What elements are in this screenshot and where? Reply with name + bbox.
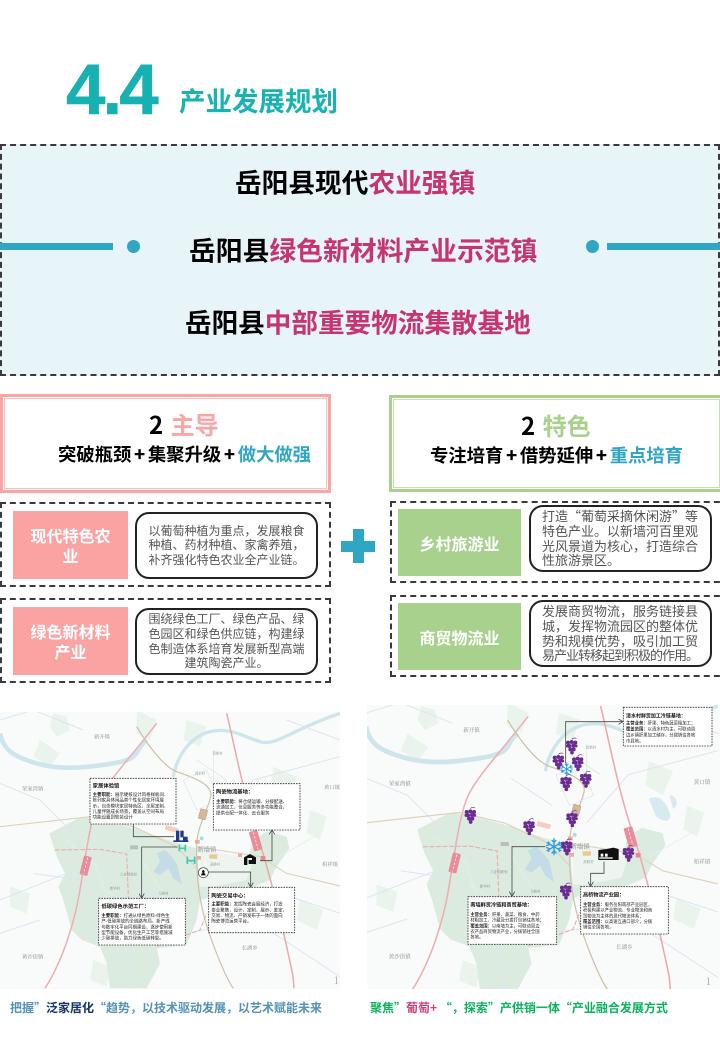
map place names: 高桥村 (210, 862, 221, 867)
description: rural tourism (529, 505, 712, 572)
right map place names: 工业园规划 (490, 869, 508, 874)
callout: Xinqiang cold chain and trade base: 覆盖范围：以南墙为主，可联动周边 (470, 922, 540, 929)
goal line 3: 岳阳县中部重要物流集散基地 (185, 302, 531, 341)
map place names: 新开镇 (94, 733, 111, 741)
callout: logistics base: 流通加工、信息服务等多功能整合， (216, 804, 287, 811)
map place names: 新华村 (110, 885, 121, 890)
callout: experience hall: 儿童伴随成长场景，覆盖从空间布局 (93, 808, 164, 815)
icon: logistics park building (598, 848, 619, 860)
section number: 4.4 (66, 51, 156, 130)
map place names: 1 (334, 973, 339, 987)
description: green materials: 建筑陶瓷产业。 (184, 654, 268, 671)
connector lines (133, 824, 272, 898)
callout: Qingshui cold chain base: 覆盖范围：以清水村为主，可联动周 (626, 726, 695, 733)
callout: Xinqiang cold chain and trade base: 南墙鲜货冷链和商贸基地： (470, 901, 532, 909)
map place names: 清水村 (195, 770, 206, 775)
callout: Gaoqiao logistics park: 主营业务：服务岳阳南部产业园区， (583, 901, 652, 908)
description: modern agriculture (135, 512, 318, 579)
icon: trade center (198, 868, 208, 878)
icon: logistics base (244, 854, 256, 865)
tag: rural tourism: 乡村旅游业 (419, 530, 500, 554)
map place names: 工业园规划 (120, 871, 137, 876)
description: trade logistics: 发展商贸物流，服务链接县 (542, 601, 698, 620)
map place names: 荣家湾镇 (22, 785, 44, 793)
map: grape industry layout (366, 692, 720, 994)
caption: left map: 把握”泛家居化“趋势，以技术驱动发展，以艺术赋能未来 (10, 999, 322, 1016)
panel: trade logistics (390, 595, 720, 677)
right map place names: 新开镇 (463, 726, 480, 734)
left accent dot (127, 240, 140, 253)
callout: logistics base: 提供仓配一体化、云仓服务 (216, 809, 270, 816)
right map place names: 柏祥镇 (694, 857, 711, 865)
callout: Qingshui cold chain base: 边乡镇肝果加工储存，分拨销往各地 (626, 732, 696, 739)
right map place names: 新华村 (480, 883, 491, 888)
description: trade logistics: 势和规模优势，吸引加工贸 (542, 630, 698, 650)
leading heading: 2 主导 (149, 406, 219, 441)
description: green materials: 围绕绿色工厂、绿色产品、绿 (148, 610, 304, 627)
callout: Qingshui cold chain base: 市县地。 (626, 738, 643, 745)
icon: small cold storage flake (561, 763, 572, 775)
callout: Gaoqiao logistics park: 积极构建以产业物流、专业物流和商 (583, 907, 653, 914)
panel: leading industries header (0, 394, 331, 493)
description: green materials: 色园区和绿色供应链，构建绿 (148, 625, 304, 642)
right map place names: 黄沙街镇 (389, 953, 411, 961)
map place names: 马鞍村 (159, 890, 169, 895)
right map place names: 荣家湾镇 (389, 780, 411, 788)
callout: logistics base (213, 784, 300, 830)
callout: green factory: 产-低碳排放的全链路布局，新产线 (101, 918, 170, 925)
right map place names: 筠新村 (586, 744, 597, 749)
callout: trade center (209, 887, 295, 933)
map place names: 筠新村 (213, 750, 223, 755)
right map place names: 新墙镇 (570, 841, 590, 851)
tag: trade logistics: 商贸物流业 (419, 624, 500, 648)
callout: green factory: 型节能设备，优化生产工艺等措施减 (101, 929, 173, 936)
callout: Gaoqiao logistics park: 高桥物流产业园： (583, 891, 624, 899)
callout: green factory: 主要职能：打通从绿色原料-绿色生 (101, 912, 170, 919)
callout: Qingshui cold chain base: 主营业务：肝果、特色蔬菜粗加工； (626, 720, 695, 727)
tag: modern agriculture: 现代特色农 (30, 523, 110, 547)
callout: green factory: 少碳排放，助力绿色低碳转型。 (101, 935, 164, 942)
panel: rural tourism (390, 501, 720, 583)
description: rural tourism: 光风景道为核心，打造综合 (542, 536, 698, 554)
right map place names: 马鞍村 (530, 888, 541, 893)
callout: logistics base: 主要职能：将仓储运输、分拨配送、 (216, 798, 287, 805)
callout: green factory: 与数字化平台同期建设，逐步使用新 (101, 923, 173, 930)
callout: logistics base: 陶瓷物流基地： (216, 788, 253, 796)
callout: experience hall: 示，包含模块家居特色区、全屋定制、 (93, 802, 168, 809)
map place names (22, 733, 341, 987)
callout: trade center: 泰业聚集，设计、定制、展示、鉴定、 (211, 906, 287, 913)
map place names: 长湖乡 (242, 943, 258, 951)
callout: Gaoqiao logistics park: 贸物流为主体的现代物流体系； (583, 912, 644, 919)
tag: green materials: 产业 (54, 639, 86, 663)
right accent dot (586, 240, 599, 253)
icon: plus sign (341, 529, 375, 563)
right map place names: 1 (706, 973, 711, 988)
callout: green factory (99, 898, 185, 945)
description: trade logistics (529, 600, 712, 667)
goal line 2: 岳阳县绿色新材料产业示范镇 (189, 230, 537, 269)
right accent bar (607, 243, 720, 250)
callout: Xinqiang cold chain and trade base: 各地。 (470, 934, 483, 941)
right map place names: 黄口镇 (694, 778, 711, 786)
description: rural tourism: 特色产业。以新墙河百里观 (542, 521, 698, 540)
callout: green factory: 低碳绿色示范工厂： (101, 902, 149, 910)
description: green materials (135, 608, 318, 675)
icon: experience hall (173, 831, 188, 842)
callout: experience hall: 主要职能：展示硬核设计风格样板间、 (93, 791, 168, 798)
icon: large cold storage flake (547, 839, 561, 855)
icon: green factories (179, 845, 195, 864)
callout: Qingshui cold chain base: 清水村鲜货加工冷链基地： (626, 712, 686, 719)
tag: rural tourism (398, 509, 521, 576)
leading strategy: 突破瓶颈+集聚升级+做大做强 (58, 441, 311, 467)
map place names: 黄口镇 (324, 783, 341, 791)
right map place names: 高桥村 (583, 859, 594, 864)
callout: Qingshui cold chain base (623, 707, 712, 746)
callout: experience hall: 家居体验馆 (93, 781, 120, 789)
callout: Gaoqiao logistics park: 销往全国各地。 (583, 924, 613, 931)
maps (0, 705, 718, 989)
caption: right map: 聚焦”葡萄+ “，探索”产供销一体“产业融合发展方式 (370, 999, 668, 1016)
map place names: 新墙镇 (197, 845, 217, 854)
callout: Gaoqiao logistics park (581, 887, 668, 934)
description: rural tourism: 性旅游景区。 (542, 550, 620, 569)
tag: trade logistics (398, 603, 521, 670)
section title: 产业发展规划 (179, 80, 338, 119)
callout: experience hall: 功能设置到软装设计 (93, 814, 133, 821)
callout: Xinqiang cold chain and trade base: 农产品商贸物流产业，分拨销往全国 (470, 928, 540, 935)
right map place names (389, 726, 711, 988)
callout: Xinqiang cold chain and trade base: 主营业务：肝果、蔬菜、粮食、中药 (470, 911, 540, 918)
map: pan-home industry layout (0, 712, 340, 989)
tag: modern agriculture (13, 511, 128, 579)
callout: Xinqiang cold chain and trade base (468, 897, 557, 944)
panel: characteristic industries header (389, 395, 720, 492)
description: trade logistics: 城，发挥物流园区的整体优 (542, 616, 698, 635)
description: rural tourism: 打造“葡萄采摘休闲游”等 (542, 506, 698, 525)
description: modern agriculture: 以葡萄种植为重点，发展粮食 (148, 522, 304, 539)
description: modern agriculture: 种植、药材种植、家禽养殖， (148, 536, 304, 553)
connector lines (512, 722, 623, 896)
left accent bar (0, 243, 113, 250)
panel: modern agriculture (0, 502, 331, 587)
callout: trade center: 交易、物流、产销发布于一体的面向 (211, 912, 283, 919)
characteristic strategy: 专注培育+借势延伸+重点培育 (430, 442, 683, 468)
tag: modern agriculture: 业 (62, 543, 78, 567)
callout: Gaoqiao logistics park: 覆盖范围：以高速互通口部介，分拨 (583, 918, 653, 925)
tag: green materials: 绿色新材料 (30, 619, 110, 643)
callout: Xinqiang cold chain and trade base: 材粗加工、冷藏及分拨打包销往各地； (470, 917, 544, 924)
callout: experience hall: 陈列家具休闲品类个性化居家环境展 (93, 797, 164, 804)
callout: trade center: 陶瓷博览运营平台。 (211, 918, 251, 925)
description: modern agriculture: 补齐强化特色农业全产业链。 (148, 551, 304, 568)
panel: green materials (0, 598, 331, 683)
map place names: 黄沙街镇 (22, 953, 44, 961)
callout: trade center: 主要职能：发挥陶瓷会展经济，打造 (211, 901, 283, 908)
callout: experience hall (90, 778, 176, 824)
description: green materials: 色制造体系培育发展新型高端 (148, 640, 304, 656)
tag: green materials (13, 607, 128, 675)
map place names: 柏祥镇 (322, 860, 339, 868)
goal line 1: 岳阳县现代农业强镇 (235, 162, 475, 201)
callout: trade center: 陶瓷交易中心： (211, 891, 249, 899)
icons: grape clusters (464, 738, 634, 899)
right map place names: 长湖乡 (616, 943, 633, 951)
characteristic heading: 2 特色 (521, 407, 591, 442)
description: trade logistics: 易产业转移起到积极的作用。 (542, 645, 698, 664)
panel: positioning goals (0, 144, 720, 376)
